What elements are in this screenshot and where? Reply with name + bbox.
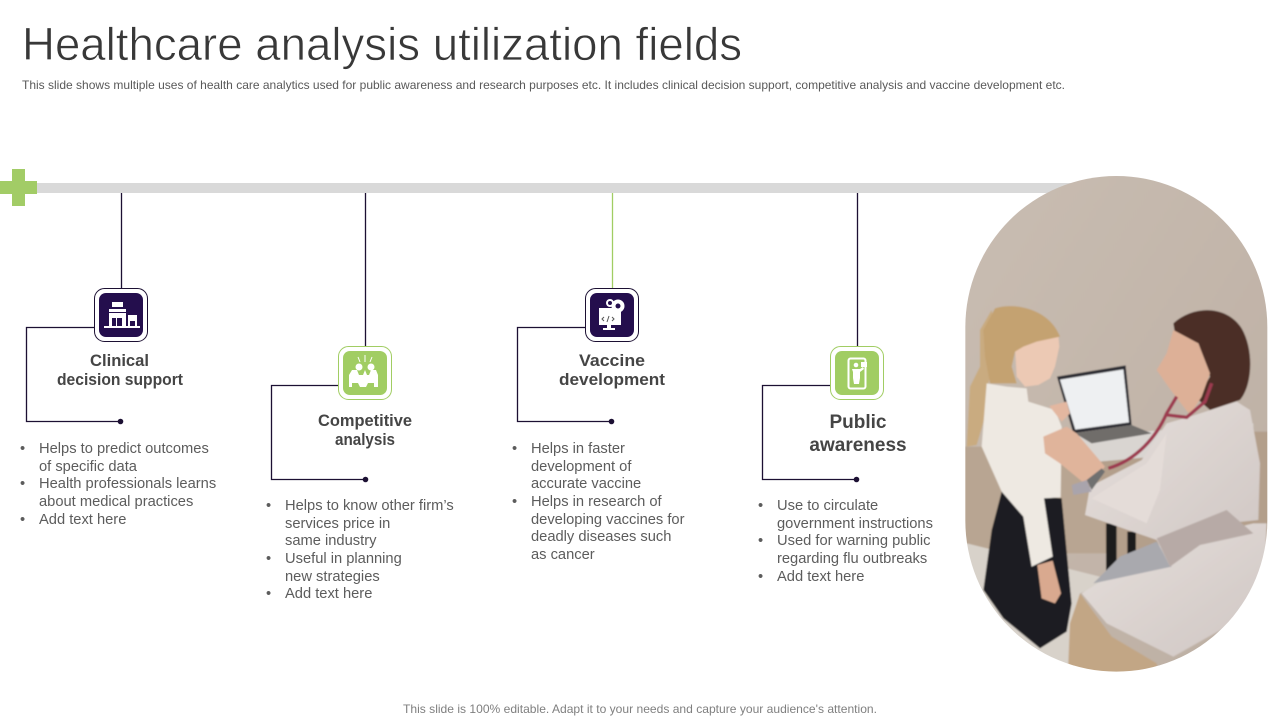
bullet list: Helps to know other firm’s xyxy=(285,498,454,514)
coat folds xyxy=(1157,510,1253,567)
bullet list: Add text here xyxy=(777,569,864,585)
bullet list: Add text here xyxy=(285,586,372,602)
footer note: This slide is 100% editable. Adapt it to your needs and capture your audience's attention. xyxy=(403,702,877,716)
connector: bar to icon xyxy=(612,193,614,289)
heading: Vaccine xyxy=(579,351,645,370)
bullet list: government instructions xyxy=(777,516,933,532)
table legs xyxy=(1106,523,1136,575)
subtitle description: This slide shows multiple uses of health care analytics used for public awareness and research purposes etc. It includes clinical decision support, competitive analysis and vaccine development etc. xyxy=(22,78,1065,92)
heading: decision support xyxy=(57,370,183,389)
dot marker xyxy=(118,419,123,424)
doctor coat skirt xyxy=(1082,523,1267,657)
bullet list: developing vaccines for xyxy=(531,512,685,528)
connector: bar to icon xyxy=(856,193,858,347)
column: competitive analysis xyxy=(266,193,454,602)
heading: analysis xyxy=(335,430,395,449)
child raised hand xyxy=(1049,402,1070,422)
bullet list: • xyxy=(758,498,763,514)
icon: green plus xyxy=(0,169,37,206)
doctor coat body xyxy=(1084,401,1261,545)
bullet list: Helps in research of xyxy=(531,494,663,510)
bullet list: • xyxy=(512,494,517,510)
wristwatch xyxy=(1087,468,1105,490)
bullet list: • xyxy=(758,569,763,585)
bullet list: same industry xyxy=(285,533,377,549)
connector: bar to icon xyxy=(120,193,122,289)
column: clinical decision support xyxy=(20,193,216,528)
timeline bar xyxy=(36,183,1076,193)
desk top xyxy=(1073,423,1253,462)
icon: team meeting xyxy=(338,346,392,400)
doctor sleeve highlight xyxy=(1129,486,1160,522)
bullet list: Use to circulate xyxy=(777,498,878,514)
photo: doctor examining a child xyxy=(965,176,1268,672)
bullet list: accurate vaccine xyxy=(531,476,641,492)
child ponytail xyxy=(966,310,992,447)
floor xyxy=(967,542,1100,664)
bench right side xyxy=(1241,432,1268,538)
wall xyxy=(965,176,1268,666)
dot marker xyxy=(363,477,368,482)
heading: Public xyxy=(829,412,887,433)
bullet list: • xyxy=(266,551,271,567)
bullet list: • xyxy=(758,533,763,549)
column: vaccine development xyxy=(512,193,685,563)
bullet list: regarding flu outbreaks xyxy=(777,551,927,567)
bullet list: as cancer xyxy=(531,547,595,563)
bullet list: of specific data xyxy=(39,459,138,475)
bullet list: Helps in faster xyxy=(531,441,625,457)
bullet list: Add text here xyxy=(39,512,126,528)
desk panel xyxy=(1112,458,1155,559)
laptop screen xyxy=(1060,369,1129,430)
connector: bar to icon xyxy=(364,193,366,347)
child face xyxy=(1015,335,1059,387)
doctor hand xyxy=(1043,427,1105,487)
bullet list: • xyxy=(20,512,25,528)
bullet list: about medical practices xyxy=(39,494,193,510)
stethoscope tube xyxy=(1108,383,1212,468)
column: public awareness xyxy=(758,193,933,585)
bullet list: Helps to predict outcomes xyxy=(39,441,209,457)
icon: hospital xyxy=(94,288,148,342)
child hair xyxy=(983,306,1060,383)
dot marker xyxy=(609,419,614,424)
bullet list: • xyxy=(512,441,517,457)
connector: icon to text xyxy=(518,328,611,422)
connector: icon to text xyxy=(762,386,856,480)
icon: phone with person xyxy=(830,346,884,400)
bench behind child xyxy=(965,446,1107,554)
heading: Competitive xyxy=(318,411,412,430)
child hand xyxy=(1037,561,1061,603)
connector: icon to text xyxy=(272,386,365,480)
bullet list: • xyxy=(20,441,25,457)
coat shadow xyxy=(1093,542,1172,583)
bullet list: services price in xyxy=(285,516,390,532)
bullet list: development of xyxy=(531,459,632,475)
doctor legs xyxy=(1068,594,1158,672)
child skirt xyxy=(983,492,1072,648)
bullet list: new strategies xyxy=(285,569,380,585)
dot marker xyxy=(854,477,859,482)
doctor hair xyxy=(1173,310,1250,410)
bullet list: • xyxy=(20,476,25,492)
bullet list: Useful in planning xyxy=(285,551,402,567)
child sweater xyxy=(982,383,1062,567)
doctor face xyxy=(1157,330,1210,415)
bullet list: deadly diseases such xyxy=(531,529,671,545)
sleeve cuff xyxy=(1072,480,1092,495)
laptop bezel xyxy=(1057,365,1132,433)
bullet list: • xyxy=(266,498,271,514)
heading: awareness xyxy=(809,435,907,456)
bullet list: Used for warning public xyxy=(777,533,930,549)
title: Healthcare analysis utilization fields xyxy=(22,18,742,70)
laptop keyboard xyxy=(1075,425,1152,443)
bullet list: • xyxy=(266,586,271,602)
bullet list: Health professionals learns xyxy=(39,476,216,492)
connector: icon to text xyxy=(26,328,120,422)
heading: Clinical xyxy=(90,351,149,370)
heading: development xyxy=(559,370,665,389)
icon: monitor and gears xyxy=(586,288,638,342)
